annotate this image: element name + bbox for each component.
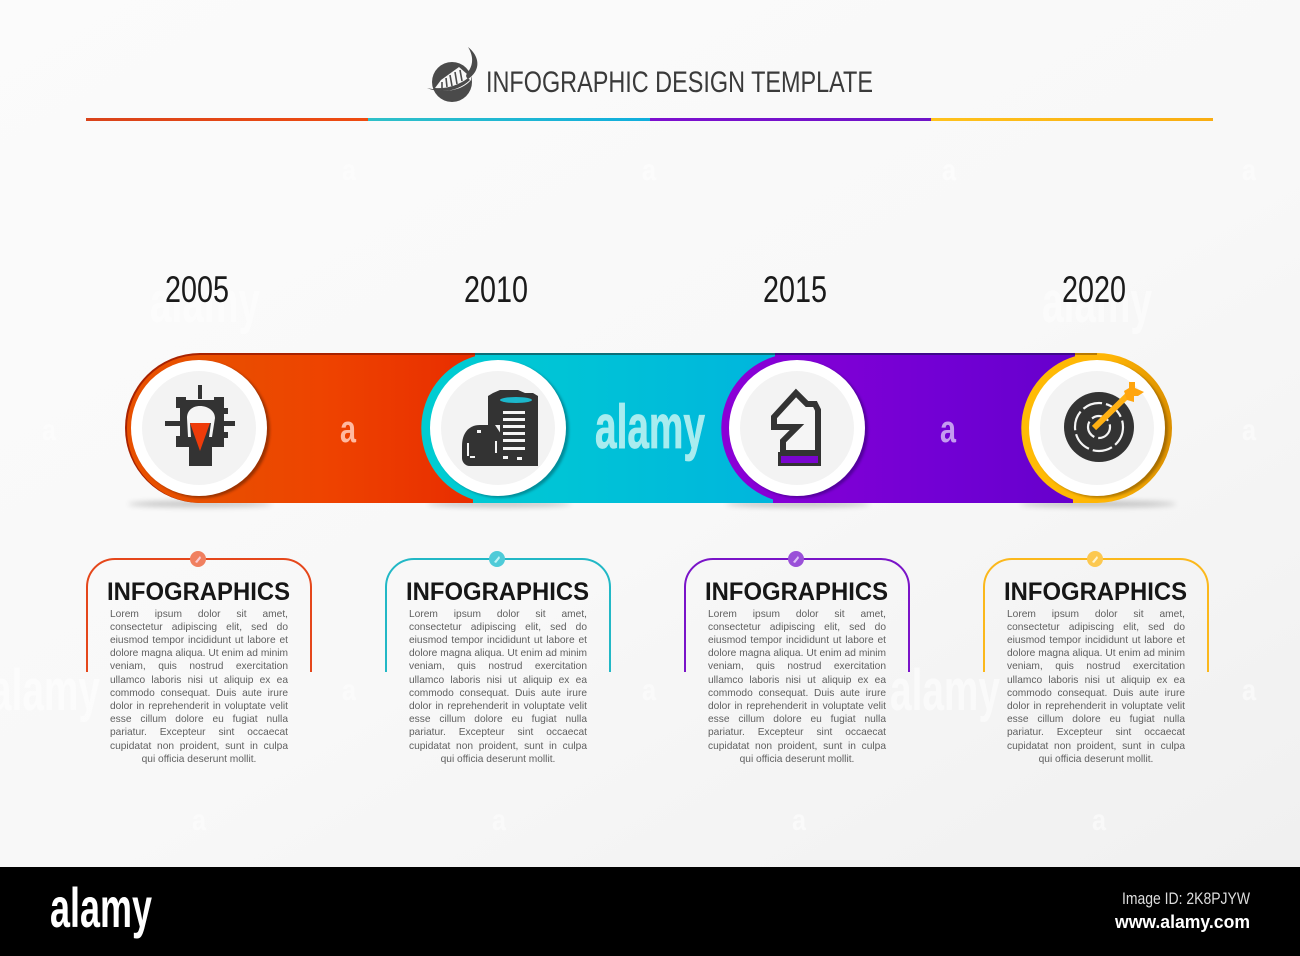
text block: esse cillum dolore eu fugiat nulla — [708, 714, 886, 725]
segment: teal — [421, 353, 800, 503]
text block: ullamco laboris nisi ut aliquip ex ea — [110, 675, 288, 686]
text block: cupidatat non proident, sunt in culpa — [1007, 741, 1185, 752]
year labels: 2010 — [464, 269, 528, 310]
text block: qui officia deserunt mollit. — [1039, 754, 1153, 765]
segment: yellow — [1021, 353, 1172, 503]
text block: cupidatat non proident, sunt in culpa — [110, 741, 288, 752]
watermarks on bar — [340, 393, 957, 462]
background watermarks: a — [1092, 804, 1106, 837]
panel: 2020 — [983, 551, 1209, 765]
watermarks on bar: a — [940, 409, 957, 451]
text block: ullamco laboris nisi ut aliquip ex ea — [1007, 675, 1185, 686]
node 4: target — [1029, 360, 1168, 498]
text block: commodo consequat. Duis aute irure — [409, 688, 587, 699]
text block: cupidatat non proident, sunt in culpa — [708, 741, 886, 752]
text block — [1007, 609, 1186, 765]
heading: INFOGRAPHICS — [705, 578, 888, 606]
marker dot — [788, 551, 804, 567]
ground shadows — [128, 501, 1176, 507]
text block: cupidatat non proident, sunt in culpa — [409, 741, 587, 752]
text block: consectetur adipiscing elit, sed do — [708, 622, 886, 633]
icon: coins and stack — [462, 390, 538, 466]
footer logo: alamy — [50, 876, 152, 939]
node 1: light bulb — [131, 360, 270, 498]
background watermarks: alamy — [890, 658, 1000, 723]
background watermarks: a — [42, 414, 56, 447]
marker dot — [1087, 551, 1103, 567]
image id: Image ID: 2K8PJYW — [1122, 889, 1250, 908]
text block: consectetur adipiscing elit, sed do — [1007, 622, 1185, 633]
segment: purple — [721, 353, 1097, 503]
header colour rule — [86, 118, 1213, 120]
text block: veniam, quis nostrud exercitation — [409, 661, 587, 672]
text block: dolore magna aliqua. Ut enim ad minim — [409, 648, 587, 659]
text block: qui officia deserunt mollit. — [142, 754, 256, 765]
background watermarks: a — [642, 674, 656, 707]
outline — [685, 559, 909, 672]
heading: INFOGRAPHICS — [1004, 578, 1187, 606]
background watermarks: a — [342, 674, 356, 707]
year labels: 2020 — [1062, 269, 1126, 310]
background watermarks: a — [942, 154, 956, 187]
text block: dolor in reprehenderit in voluptate velit — [1007, 701, 1185, 712]
background watermarks: a — [1242, 154, 1256, 187]
marker dot — [190, 551, 206, 567]
background watermarks: a — [642, 154, 656, 187]
text block: consectetur adipiscing elit, sed do — [110, 622, 288, 633]
text block: veniam, quis nostrud exercitation — [708, 661, 886, 672]
year labels — [165, 269, 1126, 310]
node 3: chess knight — [729, 360, 868, 498]
text block — [708, 609, 886, 765]
background watermarks: alamy — [1042, 270, 1152, 335]
text block: qui officia deserunt mollit. — [441, 754, 555, 765]
text block: eiusmod tempor incididunt ut labore et — [708, 635, 886, 646]
text block: esse cillum dolore eu fugiat nulla — [1007, 714, 1185, 725]
text block — [110, 609, 288, 765]
background watermarks: a — [1242, 674, 1256, 707]
text block: veniam, quis nostrud exercitation — [1007, 661, 1185, 672]
text block: dolore magna aliqua. Ut enim ad minim — [708, 648, 886, 659]
text block: consectetur adipiscing elit, sed do — [409, 622, 587, 633]
footer band — [0, 867, 1300, 956]
heading: INFOGRAPHICS — [406, 578, 589, 606]
text block — [409, 609, 588, 765]
year labels: 2015 — [763, 269, 827, 310]
text block: ullamco laboris nisi ut aliquip ex ea — [708, 675, 886, 686]
text block: veniam, quis nostrud exercitation — [110, 661, 288, 672]
background watermarks: alamy — [150, 270, 260, 335]
text block: pariatur. Excepteur sint occaecat — [110, 727, 288, 738]
text block: Lorem ipsum dolor sit amet, — [110, 609, 288, 620]
timeline bar — [125, 353, 1174, 510]
background watermarks: a — [192, 804, 206, 837]
text block: Lorem ipsum dolor sit amet, — [409, 609, 587, 620]
year labels: 2005 — [165, 269, 229, 310]
outline — [984, 559, 1208, 672]
text block: dolore magna aliqua. Ut enim ad minim — [110, 648, 288, 659]
text block: commodo consequat. Duis aute irure — [1007, 688, 1185, 699]
outline — [87, 559, 311, 672]
text block: dolore magna aliqua. Ut enim ad minim — [1007, 648, 1185, 659]
text block: dolor in reprehenderit in voluptate velit — [110, 701, 288, 712]
watermarks on bar: a — [340, 409, 357, 451]
marker dot — [489, 551, 505, 567]
header logo icon — [427, 47, 478, 102]
text block: eiusmod tempor incididunt ut labore et — [1007, 635, 1185, 646]
background watermarks: a — [492, 804, 506, 837]
text block: Lorem ipsum dolor sit amet, — [708, 609, 886, 620]
text block: eiusmod tempor incididunt ut labore et — [110, 635, 288, 646]
icon: target with arrow — [1064, 382, 1144, 462]
text block: pariatur. Excepteur sint occaecat — [409, 727, 587, 738]
title: INFOGRAPHIC DESIGN TEMPLATE — [486, 66, 873, 99]
text block: commodo consequat. Duis aute irure — [110, 688, 288, 699]
text block: pariatur. Excepteur sint occaecat — [708, 727, 886, 738]
text block: ullamco laboris nisi ut aliquip ex ea — [409, 675, 587, 686]
background watermarks: a — [1242, 414, 1256, 447]
background watermarks: a — [792, 804, 806, 837]
node 2: coins and documents — [430, 360, 569, 498]
outline — [386, 559, 610, 672]
text block: esse cillum dolore eu fugiat nulla — [409, 714, 587, 725]
text block: eiusmod tempor incididunt ut labore et — [409, 635, 587, 646]
panel: 2015 — [684, 551, 910, 765]
text block: esse cillum dolore eu fugiat nulla — [110, 714, 288, 725]
watermarks on bar: alamy — [595, 393, 705, 462]
text block: qui officia deserunt mollit. — [740, 754, 854, 765]
text block: dolor in reprehenderit in voluptate velit — [409, 701, 587, 712]
segment: red — [125, 353, 500, 503]
text block: pariatur. Excepteur sint occaecat — [1007, 727, 1185, 738]
heading: INFOGRAPHICS — [107, 578, 290, 606]
website: www.alamy.com — [1114, 912, 1250, 932]
panel: 2010 — [385, 551, 611, 765]
background watermarks: a — [342, 154, 356, 187]
icon: light bulb — [165, 385, 235, 466]
text block: dolor in reprehenderit in voluptate velit — [708, 701, 886, 712]
text block: commodo consequat. Duis aute irure — [708, 688, 886, 699]
icon: chess knight — [774, 393, 821, 466]
text block: Lorem ipsum dolor sit amet, — [1007, 609, 1185, 620]
panel: 2005 — [86, 551, 312, 765]
